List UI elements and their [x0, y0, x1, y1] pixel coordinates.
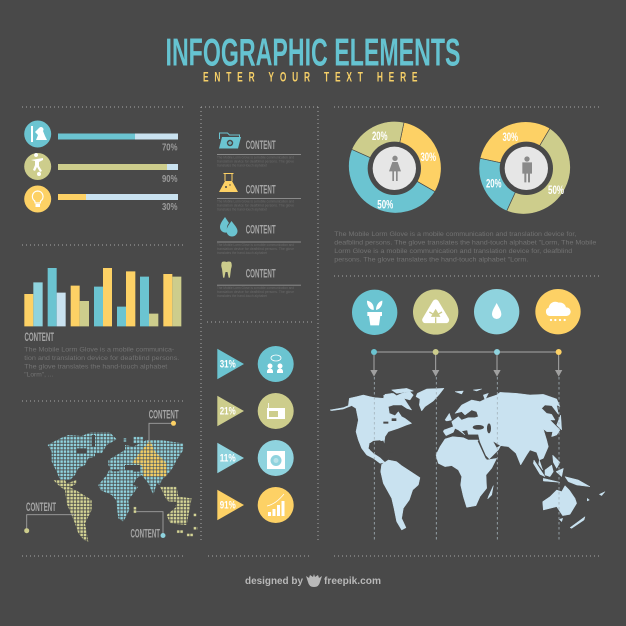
- donut description text: deafblind persons. The glove translates the hand-touch alphabet "Lorm, The Mobile: [334, 240, 597, 246]
- subtitle: ENTER YOUR TEXT HERE: [203, 71, 418, 85]
- triangle row 91%: [217, 487, 294, 523]
- list item: water drops: translates the hand-touch alphabet: [217, 251, 267, 255]
- donut chart male: [479, 122, 570, 214]
- donut 1 labels: 20%: [372, 129, 388, 143]
- list item: flask: translation device for deafblind persons. The glove: [217, 204, 294, 208]
- list item: folder: CONTENT: [246, 138, 276, 152]
- list item: water drops: The Mobile Lorm Glove is a mobile communication and: [217, 243, 294, 247]
- icon: plant: [352, 290, 397, 335]
- bar chart caption: "Lorm", ...: [24, 372, 53, 379]
- bar chart caption: tion and translation device for deafblind persons.: [24, 355, 179, 362]
- list item: flask: The Mobile Lorm Glove is a mobile communication and: [217, 200, 294, 204]
- triangle row 11%: [217, 440, 294, 476]
- bar chart: [24, 268, 181, 326]
- footer credit: designed by: [245, 576, 303, 587]
- connector timeline: [370, 349, 562, 377]
- panel: percent triangles: [217, 346, 294, 523]
- panel: donut charts: [349, 121, 570, 214]
- donut 1 labels: [372, 129, 436, 212]
- donut description text: [334, 231, 597, 264]
- dotted continents: [48, 433, 197, 542]
- donut 1 labels: 50%: [377, 198, 394, 212]
- donut description text: Lorm Glove is a mobile communication and translation device for, deafblind: [334, 248, 573, 255]
- progress row 1: [24, 120, 178, 154]
- icon: drop: [474, 289, 519, 334]
- donut 2 labels: 20%: [486, 176, 502, 190]
- callout: south america: [24, 500, 75, 533]
- icon: crown: [306, 574, 322, 587]
- list item: folder: translates the hand-touch alphabet: [217, 164, 267, 168]
- triangle row 91%: 91%: [220, 500, 236, 512]
- donut description text: persons. The glove translates the hand-touch alphabet "Lorm.: [334, 257, 528, 264]
- dotted world map: [24, 408, 197, 542]
- progress row 3: [24, 186, 178, 213]
- list item: tooth: The Mobile Lorm Glove is a mobile communication and: [217, 286, 294, 290]
- icon: recycle: [413, 289, 458, 335]
- footer credit: freepik.com: [324, 575, 381, 587]
- progress row 2: [24, 153, 178, 185]
- progress row 3: 30%: [162, 201, 178, 213]
- donut description text: The Mobile Lorm Glove is a mobile communication and translation device for,: [334, 231, 576, 238]
- donut chart female: [349, 121, 441, 213]
- world map: [330, 388, 605, 530]
- list item: flask: [217, 174, 301, 212]
- bar chart caption: CONTENT: [24, 330, 54, 344]
- triangle row 31%: [217, 346, 294, 382]
- list item: folder: [217, 133, 301, 168]
- bar chart caption: [24, 330, 179, 379]
- callout: australia: CONTENT: [130, 526, 160, 540]
- panel: environment icons: [352, 289, 581, 335]
- callout: asia: CONTENT: [149, 408, 179, 422]
- progress row 1: 70%: [162, 142, 178, 154]
- donut 1 labels: 30%: [420, 150, 436, 164]
- bar chart caption: The glove translates the hand-touch alphabet: [24, 363, 167, 370]
- list item: water drops: [217, 217, 301, 255]
- callout: south america: CONTENT: [26, 500, 56, 514]
- list item: tooth: CONTENT: [246, 266, 276, 280]
- list item: folder: translation device for deafblind persons. The glove: [217, 160, 294, 164]
- list item: water drops: translation device for deafblind persons. The glove: [217, 247, 294, 251]
- triangle row 11%: 11%: [220, 452, 236, 464]
- map guide lines: [374, 377, 559, 542]
- triangle row 31%: 31%: [220, 358, 236, 370]
- icon: snow cloud: [535, 289, 581, 334]
- panel: content list: [217, 133, 301, 298]
- list item: flask: CONTENT: [246, 182, 276, 196]
- list item: water drops: CONTENT: [246, 222, 276, 236]
- donut 2 labels: 50%: [548, 183, 564, 197]
- map cut-outs: [369, 418, 500, 459]
- panel: progress bars: [24, 120, 178, 213]
- list item: tooth: translates the hand-touch alphabet: [217, 294, 267, 298]
- list item: tooth: translation device for deafblind persons. The glove: [217, 290, 294, 294]
- triangle row 21%: [217, 393, 294, 429]
- bar chart caption: The Mobile Lorm Glove is a mobile communica-: [24, 347, 174, 354]
- list item: folder: The Mobile Lorm Glove is a mobile communication and: [217, 156, 294, 160]
- triangle row 21%: 21%: [220, 406, 236, 418]
- donut 2 labels: 30%: [502, 130, 518, 144]
- list item: flask: translates the hand-touch alphabet: [217, 208, 267, 212]
- footer credit: [245, 574, 381, 587]
- list item: tooth: [217, 262, 301, 298]
- progress row 2: 90%: [162, 173, 178, 185]
- donut 2 labels: [486, 130, 564, 197]
- callout: asia: [149, 408, 179, 442]
- callout: australia: [130, 512, 166, 540]
